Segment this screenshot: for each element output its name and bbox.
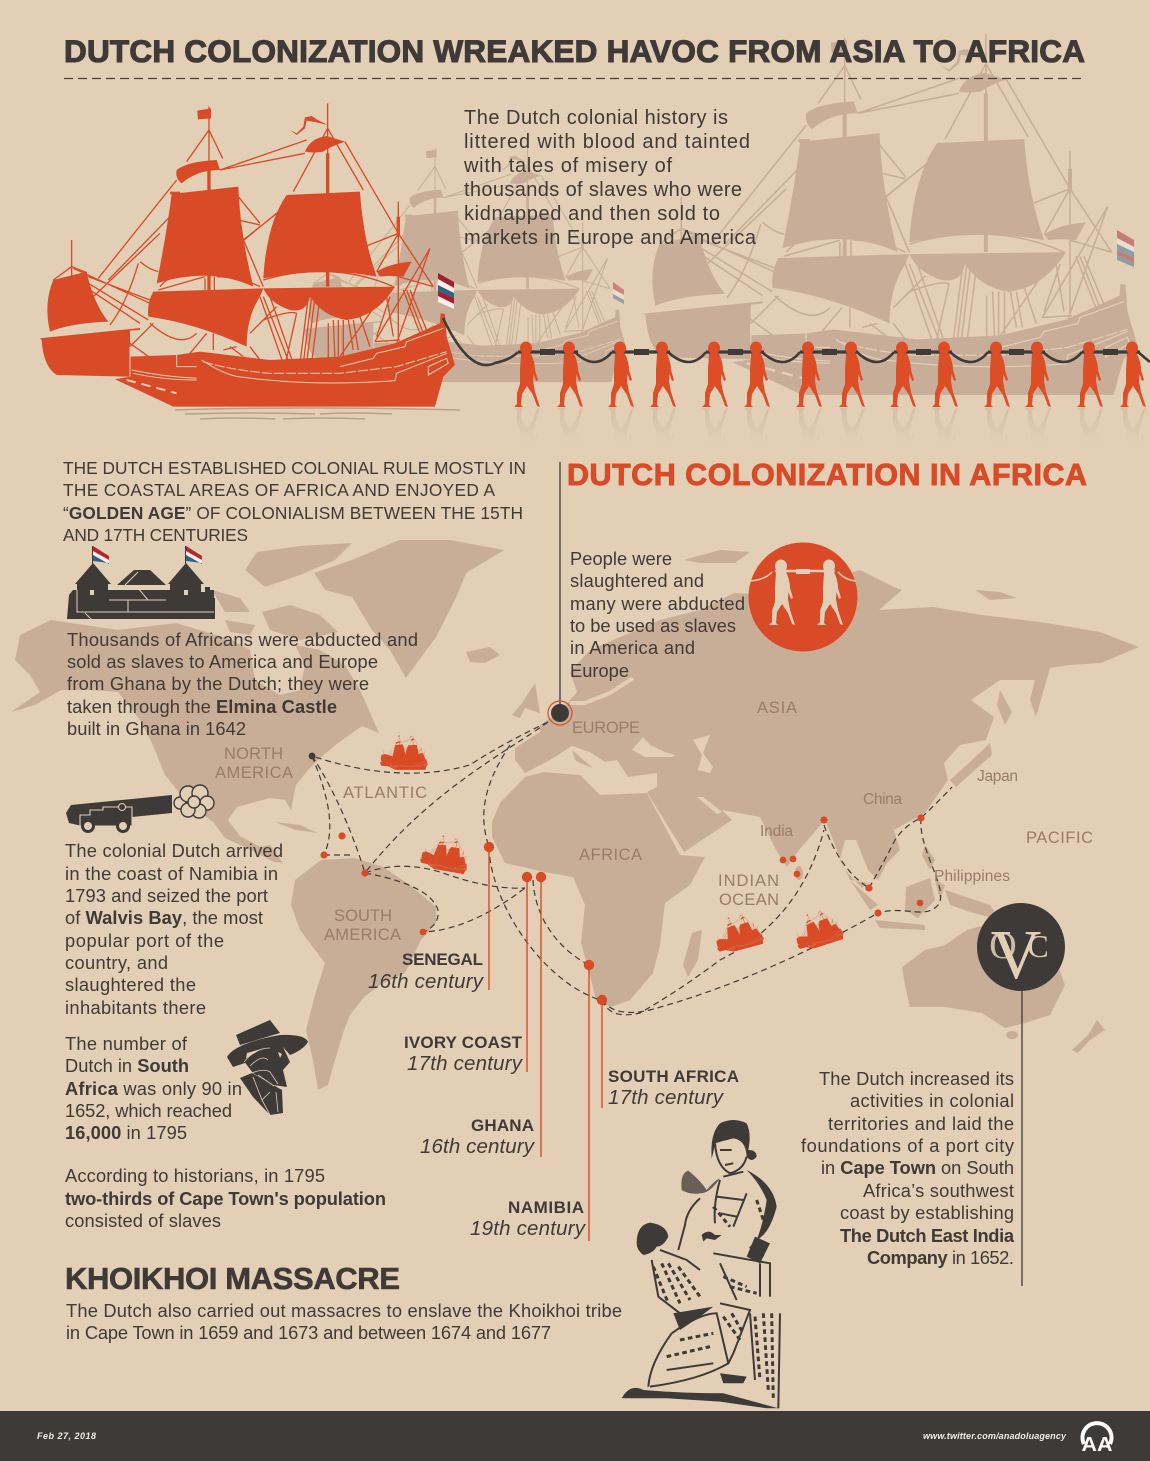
map labels	[215, 699, 1093, 944]
map ship 2	[419, 832, 472, 874]
Cape Town text: territories and laid the	[828, 1113, 1014, 1134]
VOC emblem: V	[991, 917, 1041, 994]
intro text	[463, 107, 757, 249]
Dutch in South Africa text: Dutch in South	[65, 1055, 189, 1076]
map labels: NORTH	[224, 745, 283, 763]
flag on ship	[438, 273, 454, 309]
icon: Elmina castle	[67, 546, 215, 620]
Dutch in South Africa text: 1652, which reached	[65, 1100, 232, 1121]
South Africa label: SOUTH AFRICA	[608, 1067, 739, 1086]
Cape Town text: Africa’s southwest	[863, 1180, 1014, 1201]
footer: www.twitter.com/anadoluagency	[923, 1431, 1067, 1441]
map labels: INDIAN	[718, 872, 779, 890]
intro text: The Dutch colonial history is	[464, 107, 728, 129]
two-thirds text: According to historians, in 1795	[65, 1165, 325, 1186]
Namibia text: in the coast of Namibia in	[65, 863, 278, 884]
map ships	[380, 735, 428, 770]
South Africa label: 17th century	[608, 1086, 725, 1109]
ghost ship small	[303, 146, 627, 382]
Dutch in South Africa text	[65, 1033, 242, 1143]
Namibia text: slaughtered the	[65, 974, 196, 995]
icon: portrait	[227, 1020, 308, 1115]
map labels: India	[760, 823, 793, 840]
map ship 4	[789, 905, 845, 953]
location labels: 16th century	[368, 970, 485, 993]
golden age text	[63, 458, 526, 545]
location labels: SENEGAL	[402, 950, 483, 969]
map labels: OCEAN	[719, 891, 779, 909]
Thousands of Africans text	[67, 629, 418, 739]
location labels: 19th century	[470, 1217, 587, 1240]
Europe marker	[548, 462, 572, 725]
ghost ship large	[644, 34, 1137, 395]
Dutch in South Africa text: The number of	[65, 1033, 188, 1054]
chain	[443, 318, 1150, 365]
icon: cannon	[66, 785, 214, 832]
Namibia text: inhabitants there	[65, 997, 206, 1018]
footer	[0, 1411, 1150, 1461]
footer: Feb 27, 2018	[37, 1431, 96, 1441]
ghost flag large	[1117, 230, 1134, 267]
map labels: AFRICA	[579, 846, 642, 864]
map labels: ATLANTIC	[343, 784, 427, 802]
people slaughtered text: many were abducted	[570, 593, 745, 614]
Thousands of Africans text: sold as slaves to America and Europe	[67, 651, 378, 672]
figures	[514, 342, 1146, 407]
water ripples	[175, 408, 460, 419]
two-thirds text	[65, 1165, 386, 1231]
map labels: PACIFIC	[1026, 829, 1093, 847]
Thousands of Africans text: built in Ghana in 1642	[67, 718, 246, 739]
ghost flag small	[613, 282, 624, 304]
two-thirds text: two-thirds of Cape Town's population	[65, 1188, 386, 1209]
Thousands of Africans text: from Ghana by the Dutch; they were	[67, 673, 369, 694]
red ship	[40, 103, 455, 407]
map labels: EUROPE	[572, 719, 640, 737]
Khoikhoi text	[66, 1300, 622, 1343]
logo: AA	[1082, 1434, 1112, 1456]
South Africa label	[608, 1067, 739, 1109]
location dots	[309, 753, 925, 1005]
icon: chained slaves circle	[748, 542, 858, 652]
chain of slaves	[443, 318, 1150, 407]
intro text: kidnapped and then sold to	[464, 203, 720, 225]
location labels	[368, 950, 587, 1240]
title: DUTCH COLONIZATION WREAKED HAVOC FROM ASIA TO AFRICA	[64, 33, 1085, 69]
Khoikhoi text: The Dutch also carried out massacres to enslave the Khoikhoi tribe	[66, 1300, 622, 1321]
people slaughtered text	[570, 548, 745, 681]
map ship 3	[710, 909, 765, 956]
Namibia text: of Walvis Bay, the most	[65, 907, 263, 928]
Cape Town text: activities in colonial	[850, 1090, 1014, 1111]
Namibia text: The colonial Dutch arrived	[65, 840, 283, 861]
map labels: Philippines	[934, 868, 1010, 885]
illustration: slave and overseer statue	[622, 1120, 780, 1408]
Thousands of Africans text: taken through the Elmina Castle	[67, 696, 337, 717]
location labels: GHANA	[471, 1116, 534, 1135]
intro text: markets in Europe and America	[464, 227, 757, 249]
VOC emblem: O	[989, 925, 1017, 967]
Cape Town text: foundations of a port city	[801, 1135, 1015, 1156]
Dutch in South Africa text: Africa was only 90 in	[65, 1078, 242, 1099]
people slaughtered text: slaughtered and	[570, 570, 704, 591]
location labels: NAMIBIA	[508, 1198, 584, 1217]
Namibia text	[65, 840, 283, 1018]
intro text: with tales of misery of	[463, 155, 672, 177]
world map	[11, 540, 1139, 1090]
Namibia text: popular port of the	[65, 930, 224, 951]
map labels: SOUTH	[334, 907, 392, 925]
heading: Dutch colonization in Africa: DUTCH COLONIZATION IN AFRICA	[567, 458, 1087, 492]
people slaughtered text: in America and	[570, 637, 695, 658]
routes	[312, 722, 952, 1015]
people slaughtered text: People were	[570, 548, 672, 569]
map labels: ASIA	[757, 699, 797, 717]
intro text: thousands of slaves who were	[464, 179, 742, 201]
Thousands of Africans text: Thousands of Africans were abducted and	[67, 629, 418, 650]
map labels: AMERICA	[215, 764, 293, 782]
golden age text: “GOLDEN AGE” OF COLONIALISM BETWEEN THE 15TH	[63, 503, 523, 523]
reflection of figures	[514, 408, 1146, 424]
Khoikhoi text: in Cape Town in 1659 and 1673 and between 1674 and 1677	[66, 1322, 551, 1343]
Cape Town text: The Dutch increased its	[819, 1068, 1014, 1089]
logo	[1082, 1423, 1112, 1456]
map labels: Japan	[977, 768, 1018, 785]
Dutch in South Africa text: 16,000 in 1795	[65, 1122, 187, 1143]
Cape Town text: Company in 1652.	[867, 1247, 1014, 1268]
Cape Town text	[801, 1068, 1015, 1268]
map labels: AMERICA	[324, 926, 401, 944]
marker lines	[489, 847, 602, 1241]
Cape Town text: coast by establishing	[840, 1202, 1014, 1223]
map labels: China	[863, 791, 902, 808]
location labels: IVORY COAST	[404, 1033, 523, 1052]
people slaughtered text: Europe	[570, 660, 629, 681]
VOC emblem: C	[1027, 928, 1049, 964]
location labels: 16th century	[420, 1135, 536, 1158]
golden age text: THE COASTAL AREAS OF AFRICA AND ENJOYED A	[63, 480, 495, 500]
people slaughtered text: to be used as slaves	[570, 615, 736, 636]
VOC emblem	[977, 903, 1065, 1286]
Khoikhoi heading: KHOIKHOI MASSACRE	[65, 1261, 400, 1296]
golden age text: AND 17TH CENTURIES	[63, 525, 248, 545]
location labels: 17th century	[407, 1052, 524, 1075]
two-thirds text: consisted of slaves	[65, 1210, 221, 1231]
Namibia text: country, and	[65, 952, 168, 973]
Cape Town text: in Cape Town on South	[821, 1157, 1014, 1178]
intro text: littered with blood and tainted	[464, 131, 750, 153]
Cape Town text: The Dutch East India	[840, 1225, 1015, 1246]
golden age text: THE DUTCH ESTABLISHED COLONIAL RULE MOSTLY IN	[63, 458, 526, 478]
Namibia text: 1793 and seized the port	[65, 885, 268, 906]
